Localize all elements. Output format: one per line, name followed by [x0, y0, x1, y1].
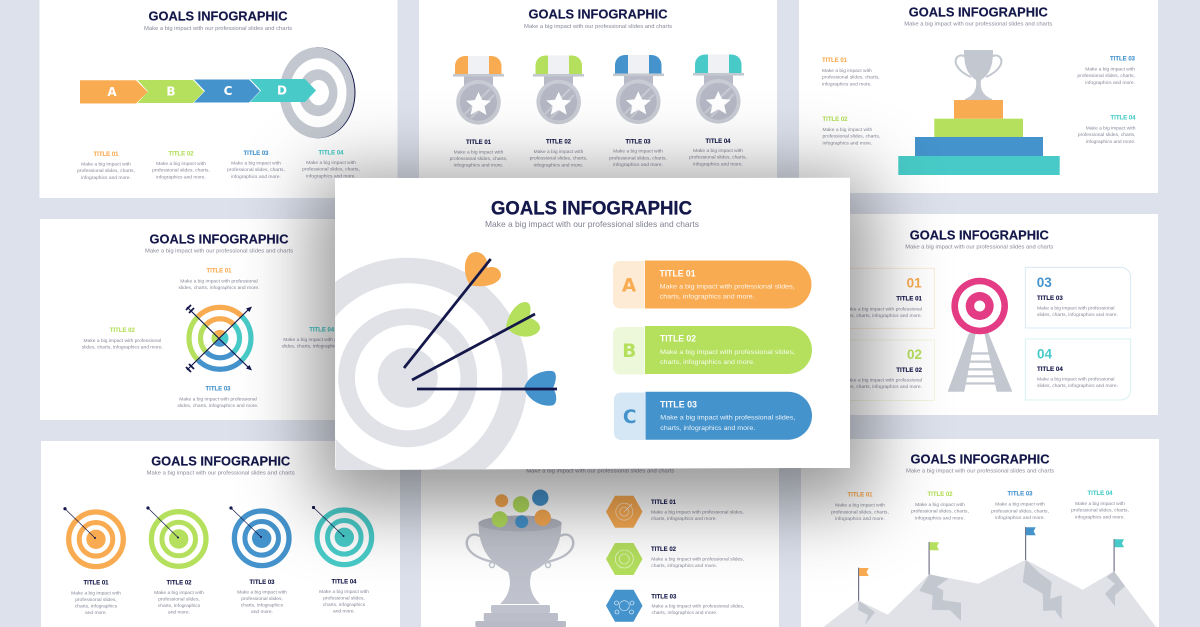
slide 7 list texts: TITLE 02 — [651, 546, 677, 553]
slide 1 arrow band: A — [107, 85, 117, 99]
slide 7 list texts: TITLE 03 — [651, 594, 677, 601]
slide 3 side texts: professional slides, charts, — [822, 74, 880, 80]
slide 1 column texts: professional slides, charts, — [77, 168, 135, 174]
slide 7 list texts: Make a big impact with professional slides, — [651, 510, 744, 516]
slide 8 heading — [906, 452, 1054, 475]
slide 7 list texts: Make a big impact with professional slides, — [651, 556, 744, 562]
box 02: 02 — [907, 347, 922, 362]
slide 3 side texts: Make a big impact with — [822, 68, 872, 74]
slide 6 column texts: and more. — [85, 610, 107, 616]
slide 4 texts: Make a big impact with professional — [283, 337, 361, 343]
main slide — [335, 178, 850, 470]
crossed arrows — [186, 305, 252, 372]
main slide layer — [335, 178, 850, 470]
card A — [613, 260, 812, 308]
slide 5 heading: GOALS INFOGRAPHIC — [910, 227, 1049, 242]
target 3 — [229, 506, 289, 566]
slide 4 texts: Make a big impact with professional — [84, 338, 161, 344]
medal 4 — [693, 54, 744, 124]
slide 4 texts — [82, 268, 363, 409]
slide 6 column texts: Make a big impact with — [237, 590, 287, 596]
slide 1 heading — [144, 9, 292, 32]
slide 3 side texts: TITLE 02 — [822, 116, 848, 123]
slide 6 column texts: Make a big impact with — [154, 590, 204, 596]
main heading — [485, 197, 699, 229]
slide 1 column texts — [77, 150, 360, 181]
slide 3 side texts: TITLE 01 — [822, 57, 848, 64]
slide 8 column texts — [831, 490, 1129, 522]
slide 8: mountain flags — [801, 439, 1159, 627]
card B: B — [622, 341, 636, 362]
slide 3 side texts: professional slides, charts, — [822, 134, 880, 140]
slide 4 texts: slides, charts, infographics and more. — [281, 344, 363, 350]
box 04: TITLE 04 — [1037, 366, 1063, 373]
slide 7 subtitle: Make a big impact with our professional slides and charts — [526, 468, 674, 474]
target 2 — [146, 506, 206, 566]
slide 6 column texts: professional slides, — [323, 596, 365, 602]
slide 6: four targets — [41, 441, 400, 627]
slide 6 column texts: professional slides, — [241, 596, 283, 602]
slide 8 column texts: TITLE 02 — [928, 491, 953, 498]
slide 5: pink target on ladder — [830, 214, 1158, 415]
slide 2 column texts: TITLE 03 — [626, 138, 651, 145]
slide 3 heading: GOALS INFOGRAPHIC — [909, 5, 1048, 20]
box 01: TITLE 01 — [896, 296, 923, 303]
card B: TITLE 02 — [660, 334, 696, 344]
card C: TITLE 03 — [660, 400, 697, 410]
slide 6 column texts: charts, infographics — [323, 602, 366, 608]
box 02: slides, charts, infographics and more. — [841, 384, 922, 390]
slide 2 column texts: TITLE 01 — [466, 139, 492, 146]
box 03: 03 — [1037, 275, 1052, 290]
slide 6 column texts: professional slides, — [75, 597, 117, 603]
main slide shadow — [335, 178, 850, 468]
slide 8 column texts: infographics and more. — [835, 516, 885, 522]
slide 2 column texts: infographics and more. — [534, 162, 583, 168]
slide 6 column texts: Make a big impact with — [319, 589, 369, 595]
box 02 — [830, 340, 934, 401]
slide 6 column texts: and more. — [333, 608, 355, 614]
box 03: Make a big impact with professional — [1037, 306, 1114, 312]
slide 3 heading: Make a big impact with our professional slides and charts — [904, 22, 1052, 28]
box 03: TITLE 03 — [1037, 295, 1063, 302]
medal 2 — [533, 56, 584, 124]
slide 6 heading: GOALS INFOGRAPHIC — [151, 454, 291, 469]
slide 1 column texts: professional slides, charts, — [302, 166, 360, 172]
box 01: Make a big impact with professional — [845, 306, 922, 312]
slide 4 texts: TITLE 04 — [309, 326, 335, 333]
slide 6 heading: Make a big impact with our professional slides and charts — [147, 471, 295, 477]
slide 1 heading: GOALS INFOGRAPHIC — [148, 9, 288, 24]
slide 2 column texts: professional slides, charts, — [530, 156, 587, 162]
slide 2 heading — [524, 7, 672, 30]
slide 1 column texts: infographics and more. — [306, 174, 356, 180]
slide 1 arrow band: C — [224, 84, 233, 98]
slide 7 list texts — [651, 499, 744, 616]
slide 6 column texts: TITLE 02 — [166, 579, 192, 586]
slide 3 side texts: infographics and more. — [822, 140, 872, 146]
slide 6 column texts: and more. — [168, 610, 190, 616]
big trophy — [467, 516, 573, 627]
slide 2 column texts: infographics and more. — [454, 163, 503, 169]
slide 2 column texts: professional slides, charts, — [689, 155, 747, 161]
slide 4 heading: Make a big impact with our professional slides and charts — [145, 248, 293, 254]
slide 3 heading — [904, 5, 1052, 28]
slide 2 column texts — [450, 138, 747, 169]
slide 6 column texts: charts, infographics — [158, 603, 201, 609]
slide 1 column texts: TITLE 02 — [168, 150, 194, 158]
coins — [492, 490, 551, 528]
big target — [335, 258, 528, 470]
slide 8 column texts: Make a big impact with — [995, 502, 1045, 508]
slide 3 side texts: infographics and more. — [1086, 139, 1136, 145]
hexagon 3 — [606, 590, 642, 622]
box 02: TITLE 02 — [896, 367, 923, 374]
box 04: slides, charts, infographics and more. — [1037, 383, 1118, 389]
slide 1 column texts: Make a big impact with — [81, 162, 131, 168]
box 01 — [830, 268, 934, 328]
slide 8 column texts: infographics and more. — [1075, 514, 1125, 520]
slide 8 column texts: TITLE 03 — [1008, 491, 1033, 498]
slide 2 column texts: TITLE 02 — [546, 139, 572, 146]
card A: TITLE 01 — [660, 268, 696, 278]
card A: Make a big impact with professional slides, — [660, 284, 795, 290]
medal 3 — [613, 55, 664, 124]
medal 1 — [453, 56, 504, 125]
card B: charts, infographics and more. — [660, 359, 755, 366]
trophy — [956, 50, 1001, 100]
slide 7: trophy with coins — [421, 450, 779, 627]
slide 1 column texts: TITLE 01 — [94, 151, 119, 158]
card B — [613, 326, 812, 374]
slide 3 side texts: Make a big impact with — [1085, 66, 1135, 72]
slide 1 heading: Make a big impact with our professional slides and charts — [144, 26, 292, 32]
slide 8 column texts: Make a big impact with — [1075, 501, 1125, 507]
slide 2 heading: GOALS INFOGRAPHIC — [528, 7, 668, 22]
podium steps — [898, 100, 1060, 175]
slide 1 column texts: Make a big impact with — [156, 161, 206, 167]
slide 5 heading: Make a big impact with our professional slides and charts — [905, 244, 1053, 250]
slide 8 column texts: professional slides, charts, — [831, 509, 889, 515]
arrow: blue — [417, 371, 557, 406]
box 04 — [1025, 339, 1131, 400]
mountains — [823, 560, 1156, 627]
hexagon 2 — [606, 543, 642, 575]
slide 6 column texts: TITLE 04 — [332, 578, 357, 585]
slide 3: trophy podium — [799, 0, 1158, 193]
slide 7 list texts: TITLE 01 — [651, 499, 677, 506]
slide 1 column texts: Make a big impact with — [306, 160, 356, 166]
slide 4 heading — [145, 231, 293, 254]
slide 1 column texts: TITLE 04 — [318, 150, 344, 157]
slide 1 target — [280, 47, 356, 138]
slide 2 column texts: Make a big impact with — [693, 148, 743, 154]
slide 2 column texts: infographics and more. — [613, 162, 663, 168]
box 01: 01 — [907, 276, 922, 291]
slide 5 heading — [905, 227, 1053, 250]
slide 4 texts: TITLE 02 — [110, 327, 135, 334]
pink target — [951, 278, 1008, 334]
card A: A — [622, 276, 637, 296]
slide 3 side texts: TITLE 04 — [1110, 114, 1136, 122]
slide 6 column texts: professional slides, — [158, 596, 200, 602]
slide 3 side texts: Make a big impact with — [822, 127, 873, 133]
slide 3 side texts: TITLE 03 — [1110, 56, 1136, 63]
card C — [614, 392, 812, 440]
slide 2 heading: Make a big impact with our professional slides and charts — [524, 24, 672, 30]
slide 2 column texts: Make a big impact with — [454, 150, 504, 156]
slide 3 side texts: Make a big impact with — [1086, 126, 1136, 132]
slide 8 column texts: infographics and more. — [995, 515, 1045, 521]
slide 7 list texts: Make a big impact with professional slides, — [652, 604, 744, 610]
slide 1 column texts: professional slides, charts, — [152, 168, 210, 174]
slide 8 column texts: TITLE 04 — [1088, 490, 1113, 497]
slide 6 column texts: charts, infographics — [75, 604, 118, 610]
slide 1 column texts: professional slides, charts, — [227, 167, 285, 173]
slide 8 column texts: infographics and more. — [915, 516, 965, 522]
slide 6 column texts: and more. — [251, 609, 273, 615]
slide 4 texts: slides, charts, infographics and more. — [178, 285, 260, 291]
slide 8 column texts: Make a big impact with — [915, 502, 965, 508]
card B: Make a big impact with professional slides, — [660, 349, 795, 356]
slide 3 side texts: infographics and more. — [822, 82, 872, 88]
arrow: orange — [404, 252, 501, 368]
slide 1 arrow band: B — [166, 84, 176, 98]
slide 7 list texts: charts, infographics and more. — [651, 563, 717, 569]
slide 1 arrow band: D — [277, 84, 287, 98]
slide 1 column texts: TITLE 03 — [244, 150, 269, 157]
box 03 — [1025, 267, 1131, 328]
slide 8 column texts: Make a big impact with — [835, 503, 885, 509]
slide 4: crossed arrows target — [40, 219, 363, 420]
target 1 — [63, 507, 123, 567]
box 04: Make a big impact with professional — [1037, 376, 1114, 382]
slide 4 texts: slides, charts, infographics and more. — [177, 403, 259, 409]
box 01: slides, charts, infographics and more. — [841, 313, 922, 319]
slide 3 side texts: infographics and more. — [1085, 80, 1135, 86]
slide 8 column texts: professional slides, charts, — [1071, 508, 1129, 514]
slide 3 side texts — [822, 56, 1136, 147]
slide 4 heading: GOALS INFOGRAPHIC — [150, 231, 289, 246]
slide 2 column texts: Make a big impact with — [534, 149, 584, 155]
slide 2 column texts: professional slides, charts, — [450, 156, 507, 162]
slide 6 heading — [147, 454, 295, 477]
box 03: slides, charts, infographics and more. — [1037, 312, 1118, 318]
slide 4 texts: TITLE 03 — [206, 385, 231, 392]
slide 1 arrow band — [80, 79, 316, 104]
quadrant target — [189, 307, 251, 369]
slide 8 column texts: professional slides, charts, — [911, 509, 969, 515]
box 02: Make a big impact with professional — [845, 378, 922, 384]
slide 4 texts: Make a big impact with professional — [179, 396, 257, 402]
flags — [858, 527, 1124, 601]
slide 3 side texts: professional slides, charts, — [1078, 132, 1136, 138]
slide 4 texts: Make a big impact with professional — [180, 278, 258, 284]
slide 6 column texts: Make a big impact with — [71, 590, 121, 596]
slide 1 column texts: infographics and more. — [81, 175, 131, 181]
slide 4 texts: slides, charts, infographics and more. — [82, 344, 163, 350]
slide 2 column texts: infographics and more. — [693, 162, 743, 168]
slide 3 side texts: professional slides, charts, — [1077, 73, 1135, 79]
box 04: 04 — [1037, 346, 1053, 361]
slide 2 column texts: professional slides, charts, — [609, 155, 667, 161]
slide 8 column texts: professional slides, charts, — [991, 508, 1049, 514]
card C: charts, infographics and more. — [660, 425, 755, 432]
slide 2 column texts: Make a big impact with — [613, 149, 663, 155]
slide 1 column texts: Make a big impact with — [231, 160, 281, 166]
card C: Make a big impact with professional slides, — [660, 415, 795, 422]
hexagon 1 — [606, 496, 642, 528]
slide 6 column texts: TITLE 03 — [250, 579, 275, 586]
slide 2 column texts: TITLE 04 — [706, 138, 731, 145]
slide 1: arrow to target — [40, 0, 398, 198]
slide 8 column texts: TITLE 01 — [848, 491, 873, 498]
slide 6 column texts: TITLE 01 — [84, 580, 109, 587]
slide 6 column texts — [71, 578, 369, 616]
main heading: Make a big impact with our professional slides and charts — [485, 220, 699, 229]
slide 6 column texts: charts, infographics — [241, 602, 284, 608]
slide 1 column texts: infographics and more. — [156, 174, 206, 180]
target 4 — [312, 506, 372, 565]
slide 7 list texts: charts, infographics and more. — [652, 610, 717, 616]
arrow: green — [412, 302, 540, 380]
ladder — [948, 333, 1012, 392]
card A: charts, infographics and more. — [660, 294, 755, 300]
slide 4 texts: TITLE 01 — [206, 268, 232, 275]
slide 8 heading: GOALS INFOGRAPHIC — [910, 452, 1050, 467]
slide 7 list texts: charts, infographics and more. — [651, 516, 717, 522]
slide 1 column texts: infographics and more. — [231, 174, 281, 180]
slide 2: medals — [419, 0, 777, 200]
card C: C — [623, 407, 636, 428]
main heading: GOALS INFOGRAPHIC — [491, 197, 692, 219]
slide 8 heading: Make a big impact with our professional slides and charts — [906, 469, 1054, 475]
